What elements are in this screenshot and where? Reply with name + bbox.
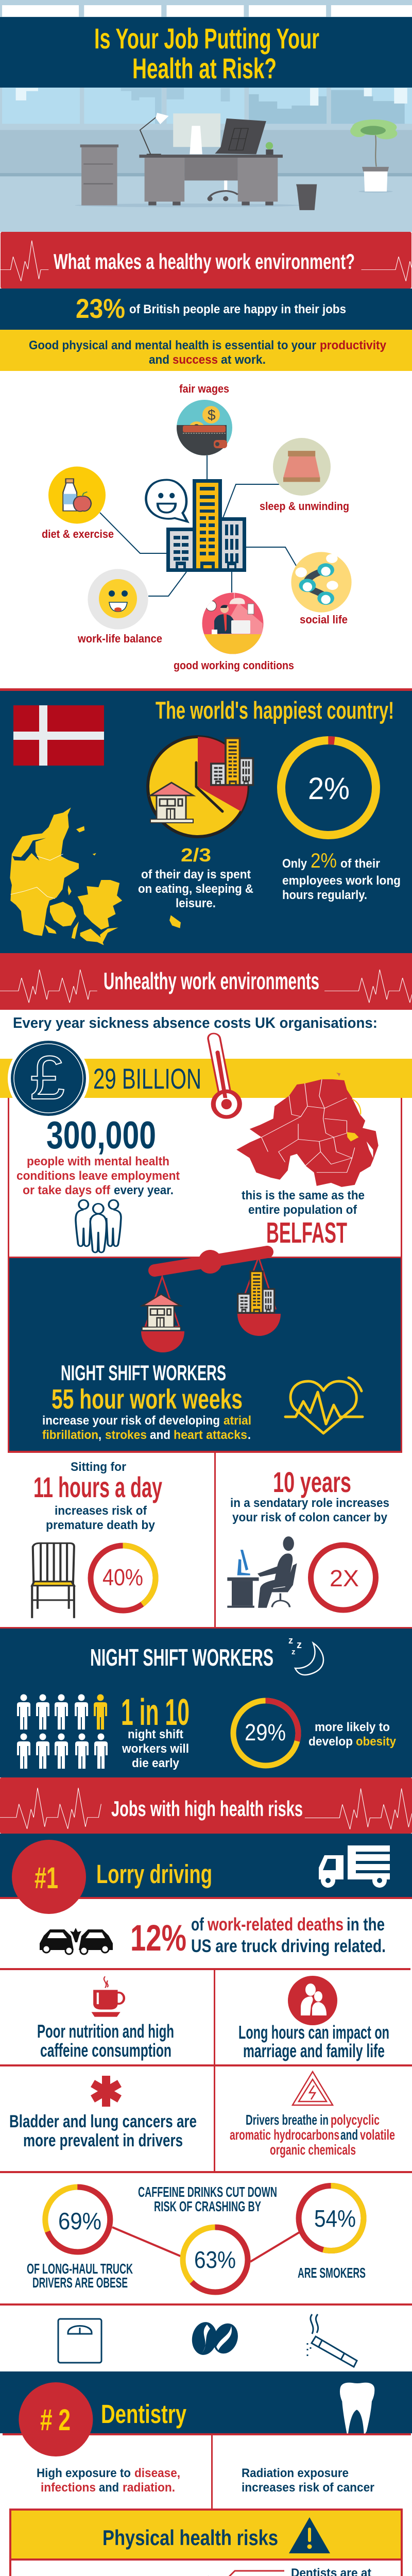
text: 12% of work-related deaths bbox=[130, 1914, 386, 1959]
text: only 2% work long hours: Only bbox=[282, 857, 307, 871]
text: 1 in 10 die early bbox=[121, 1692, 190, 1770]
text: more likely to develop obesity: more likely to bbox=[315, 1720, 390, 1734]
text: 300,000 people: people with mental health bbox=[27, 1155, 169, 1168]
text: only 2% work long hours: of their bbox=[340, 857, 380, 871]
text: caffeine drinks: RISK OF CRASHING BY bbox=[154, 2198, 261, 2214]
icon: car crash bbox=[40, 1928, 113, 1954]
badge: #2: # 2 bbox=[40, 2403, 71, 2437]
text: two thirds of day bbox=[138, 844, 253, 910]
diagram: healthy work environment hub bbox=[42, 382, 352, 672]
text: polycyclic hydrocarbons: organic chemicals bbox=[270, 2142, 356, 2158]
text: more likely to develop obesity: develop bbox=[308, 1735, 353, 1749]
callout: productivity and success bbox=[0, 330, 412, 371]
callout: productivity and success: at work. bbox=[221, 353, 266, 367]
text: two thirds of day: leisure. bbox=[176, 896, 216, 910]
callout: noise-induced hearing loss bbox=[218, 2566, 371, 2576]
text: 12% of work-related deaths: work-related deaths bbox=[207, 1914, 344, 1935]
icon: chair bbox=[32, 1543, 74, 1618]
text: more likely to develop obesity bbox=[308, 1720, 397, 1749]
text: poor nutrition: Poor nutrition and high bbox=[37, 2021, 174, 2042]
panel: sickness absence cost bbox=[0, 1033, 412, 1453]
callout: productivity and success: Good physical and mental health is essential to your bbox=[29, 338, 316, 352]
text: high exposure bbox=[37, 2466, 180, 2495]
text: long-haul drivers obese bbox=[27, 2261, 133, 2291]
text: sitting for 11 hours: increases risk of bbox=[55, 1504, 147, 1518]
text: two thirds of day: on eating, sleeping & bbox=[138, 882, 253, 896]
text: polycyclic hydrocarbons: Drivers breathe in bbox=[246, 2112, 329, 2128]
chart: 54% donut: 54% bbox=[314, 2205, 356, 2232]
panel: sitting risks bbox=[32, 1453, 389, 1627]
text: two thirds of day: of their day is spent bbox=[141, 868, 251, 882]
icon: hazard triangle bbox=[293, 2072, 333, 2105]
text: caffeine drinks: CAFFEINE DRINKS CUT DOWN bbox=[138, 2184, 277, 2200]
icon: smiling speech bubble bbox=[146, 480, 187, 522]
text: 300,000 people: 300,000 bbox=[46, 1113, 156, 1157]
text: high exposure: infections bbox=[41, 2481, 96, 2495]
icon: balance scale of home and work bbox=[141, 1250, 281, 1352]
text: only 2% work long hours: 2% bbox=[311, 850, 337, 872]
text: radiation exposure: Radiation exposure bbox=[242, 2466, 349, 2480]
chart: 69% donut: 69% bbox=[58, 2208, 101, 2234]
text: polycyclic hydrocarbons: and bbox=[340, 2127, 358, 2143]
text: same as population of Belfast: this is the same as the bbox=[242, 1189, 365, 1202]
icon: moon and zzz: z bbox=[288, 1635, 293, 1646]
panel: night shift 55 hour weeks bbox=[8, 1250, 402, 1453]
text: 12% of work-related deaths: 12% bbox=[130, 1918, 186, 1959]
text: sitting for 11 hours: Sitting for bbox=[71, 1460, 126, 1474]
heading: what makes a healthy work environment bbox=[0, 232, 412, 289]
heading: jobs with high health risks: Jobs with high health risks bbox=[111, 1797, 303, 1821]
icon: ten people, one highlighted bbox=[17, 1694, 108, 1769]
text: sickness absence intro: Every year sickness absence costs UK organisations: bbox=[13, 1015, 377, 1031]
item: sleep and unwinding bbox=[260, 438, 349, 513]
chart: 69% donut bbox=[45, 2187, 110, 2252]
text: sitting for 11 hours: premature death by bbox=[46, 1518, 156, 1532]
item: fair wages: fair wages bbox=[179, 382, 229, 395]
icon: pound coin bbox=[8, 1038, 89, 1119]
text: 12% of work-related deaths: of bbox=[191, 1914, 204, 1935]
chart: 54% donut bbox=[299, 2185, 364, 2250]
item: good working conditions bbox=[174, 592, 294, 672]
chart: 40% donut bbox=[91, 1546, 156, 1611]
panel: four lorry driver risks bbox=[0, 1968, 412, 2173]
panel: night shift workers stats bbox=[0, 1627, 412, 1777]
icon: heartbeat bbox=[285, 1378, 363, 1433]
chart: 2% ring bbox=[281, 740, 376, 835]
text: 29 billion: 29 BILLION bbox=[93, 1062, 201, 1095]
text: high exposure: and bbox=[99, 2481, 119, 2495]
chart: 63% donut: 63% bbox=[194, 2246, 236, 2273]
text: long-haul drivers obese: DRIVERS ARE OBESE bbox=[32, 2275, 128, 2291]
text: night shift workers, 55 hour work weeks: increase your risk of developing bbox=[42, 1414, 220, 1428]
text: bladder and lung cancers bbox=[9, 2112, 197, 2150]
chart: 2X ring bbox=[311, 1545, 376, 1610]
panel: physical health risks bbox=[10, 2510, 402, 2576]
text: 1 in 10 die early: night shift bbox=[128, 1727, 183, 1741]
icon: Danish flag bbox=[13, 705, 104, 766]
map: Denmark bbox=[10, 807, 181, 945]
item: work-life balance bbox=[77, 569, 162, 645]
chart: 2X ring: 2X bbox=[330, 1565, 359, 1591]
text: 12% of work-related deaths: in the bbox=[347, 1914, 385, 1935]
text: sitting for 11 hours bbox=[33, 1460, 162, 1532]
title banner: Health at Risk? bbox=[132, 52, 277, 84]
text: 10 years sedentary bbox=[230, 1466, 389, 1524]
text: more likely to develop obesity: obesity bbox=[356, 1735, 397, 1749]
figure: skeleton bbox=[183, 2576, 248, 2577]
text: only 2% work long hours: employees work long bbox=[282, 874, 401, 888]
item: fair wages: $ bbox=[208, 407, 216, 423]
callout: productivity and success: and bbox=[149, 353, 169, 367]
text: night shift workers, 55 hour work weeks bbox=[42, 1361, 251, 1442]
heading: dentistry: Dentistry bbox=[101, 2399, 186, 2429]
text: polycyclic hydrocarbons: volatile bbox=[360, 2127, 395, 2143]
icon: coffee beans bbox=[190, 2320, 242, 2357]
heading: unhealthy work environments bbox=[0, 953, 412, 1010]
text: 10 years sedentary: 10 years bbox=[273, 1466, 351, 1498]
text: long-haul drivers obese: OF LONG-HAUL TRUCK bbox=[27, 2261, 133, 2277]
icon: medical asterisk bbox=[91, 2076, 122, 2107]
chart: 63% donut bbox=[183, 2227, 248, 2292]
item: work-life balance: work-life balance bbox=[77, 632, 162, 645]
text: are smokers: ARE SMOKERS bbox=[298, 2265, 366, 2281]
callout: productivity and success: productivity bbox=[320, 338, 387, 352]
text: polycyclic hydrocarbons: polycyclic bbox=[331, 2112, 380, 2128]
map: Northern Ireland bbox=[236, 1073, 379, 1187]
text: night shift workers, 55 hour work weeks: , bbox=[98, 1428, 101, 1442]
text: long hours impact bbox=[238, 2022, 389, 2061]
text: poor nutrition bbox=[37, 2021, 174, 2061]
text: night shift workers, 55 hour work weeks: NIGHT SHIFT WORKERS bbox=[61, 1361, 226, 1385]
heading: physical health risks: Physical health risks bbox=[102, 2526, 278, 2550]
badge: #1: #1 bbox=[35, 1861, 58, 1895]
item: fair wages bbox=[177, 382, 232, 457]
icon: couple in a circle bbox=[288, 1976, 337, 2025]
text: radiation exposure bbox=[242, 2466, 374, 2495]
icon: moon and zzz: z bbox=[297, 1639, 302, 1651]
item: diet and exercise bbox=[42, 467, 114, 540]
panel: job 1 lorry driving bbox=[0, 1834, 412, 1914]
text: caffeine drinks bbox=[138, 2184, 277, 2214]
chart: pie of day with home and work icons bbox=[148, 737, 254, 837]
text: night shift workers, 55 hour work weeks: strokes bbox=[105, 1428, 147, 1442]
icon: moon and zzz bbox=[288, 1635, 323, 1675]
icon: weighing scale bbox=[58, 2319, 101, 2363]
stat: 23% happy: 23% bbox=[76, 294, 125, 324]
title banner bbox=[0, 17, 412, 88]
item: social life: social life bbox=[300, 613, 348, 626]
text: poor nutrition: caffeine consumption bbox=[40, 2040, 171, 2061]
text: same as population of Belfast: BELFAST bbox=[266, 1216, 347, 1249]
icon: tooth bbox=[340, 2383, 374, 2433]
text: polycyclic hydrocarbons: aromatic hydrocarbons bbox=[230, 2127, 339, 2143]
icon: moon and zzz: z bbox=[291, 1648, 296, 1656]
panel: job 2 dentistry bbox=[0, 2371, 412, 2509]
panel: lorry driver stats bbox=[0, 2184, 412, 2367]
stat: 23% happy bbox=[0, 289, 412, 330]
icon: three people bbox=[76, 1200, 121, 1252]
text: polycyclic hydrocarbons bbox=[230, 2112, 395, 2158]
chart: 2% ring: 2% bbox=[308, 771, 350, 806]
text: 1 in 10 die early: 1 in 10 bbox=[121, 1692, 190, 1733]
text: high exposure: disease, bbox=[134, 2466, 180, 2480]
chart: 29% donut bbox=[233, 1701, 298, 1766]
icon: warning triangle bbox=[289, 2517, 330, 2553]
hero: office illustration bbox=[0, 0, 412, 232]
badge: #1 bbox=[12, 1840, 86, 1914]
text: 300,000 people: every year. bbox=[114, 1183, 174, 1197]
callout: productivity and success: success bbox=[173, 353, 218, 367]
text: 10 years sedentary: in a sendatary role increases bbox=[230, 1496, 389, 1510]
item: sleep and unwinding: sleep & unwinding bbox=[260, 500, 349, 513]
icon: cigarette bbox=[307, 2314, 357, 2367]
icon: pound coin: £ bbox=[30, 1043, 65, 1112]
text: night shift workers, 55 hour work weeks: and bbox=[150, 1428, 170, 1442]
badge: #2 bbox=[19, 2382, 93, 2456]
text: only 2% work long hours bbox=[282, 850, 401, 902]
text: 300,000 people: conditions leave employment bbox=[16, 1169, 180, 1183]
stat: 23% happy: of British people are happy in their jobs bbox=[129, 302, 346, 316]
text: two thirds of day: 2/3 bbox=[181, 844, 211, 866]
text: 1 in 10 die early: die early bbox=[132, 1756, 180, 1770]
icon: thermometer bbox=[208, 1033, 241, 1118]
text: night shift workers, 55 hour work weeks: 55 hour work weeks bbox=[52, 1384, 243, 1415]
text: high exposure: High exposure to bbox=[37, 2466, 131, 2480]
item: diet and exercise: diet & exercise bbox=[42, 528, 114, 540]
text: 10 years sedentary: your risk of colon cancer by bbox=[232, 1511, 388, 1524]
text: night shift workers, 55 hour work weeks: fibrillation bbox=[42, 1428, 98, 1442]
chart: 40% donut: 40% bbox=[102, 1564, 143, 1590]
text: 300,000 people bbox=[16, 1113, 180, 1197]
icon: coffee cup bbox=[92, 1976, 124, 2017]
text: sitting for 11 hours: 11 hours a day bbox=[33, 1471, 162, 1503]
chart: 29% donut: 29% bbox=[245, 1719, 286, 1745]
heading: night shift workers: NIGHT SHIFT WORKERS bbox=[90, 1644, 273, 1671]
text: radiation exposure: increases risk of cancer bbox=[242, 2481, 374, 2495]
text: night shift workers, 55 hour work weeks: . bbox=[248, 1428, 251, 1442]
icon: lorry bbox=[319, 1845, 390, 1888]
heading: jobs with high health risks bbox=[0, 1777, 412, 1834]
icon: person sitting at computer bbox=[227, 1536, 297, 1608]
text: same as population of Belfast: entire population of bbox=[248, 1203, 357, 1217]
text: 1 in 10 die early: workers will bbox=[122, 1742, 189, 1756]
heading: lorry driving: Lorry driving bbox=[96, 1859, 212, 1889]
text: night shift workers, 55 hour work weeks: atrial bbox=[224, 1414, 251, 1428]
icon: central office building bbox=[166, 479, 246, 572]
text: 300,000 people: or take days off bbox=[23, 1183, 111, 1197]
text: bladder and lung cancers: Bladder and lung cancers are bbox=[9, 2112, 197, 2131]
item: social life bbox=[291, 552, 352, 626]
text: high exposure: radiation. bbox=[123, 2481, 175, 2495]
item: good working conditions: good working conditions bbox=[174, 659, 294, 672]
text: bladder and lung cancers: more prevalent in drivers bbox=[23, 2131, 183, 2150]
text: only 2% work long hours: hours regularly. bbox=[282, 888, 367, 902]
text: same as population of Belfast bbox=[242, 1189, 365, 1249]
item: fair wages: £ bbox=[193, 422, 199, 436]
text: night shift workers, 55 hour work weeks: heart attacks bbox=[174, 1428, 247, 1442]
panel: Denmark, the world's happiest country bbox=[0, 688, 412, 953]
